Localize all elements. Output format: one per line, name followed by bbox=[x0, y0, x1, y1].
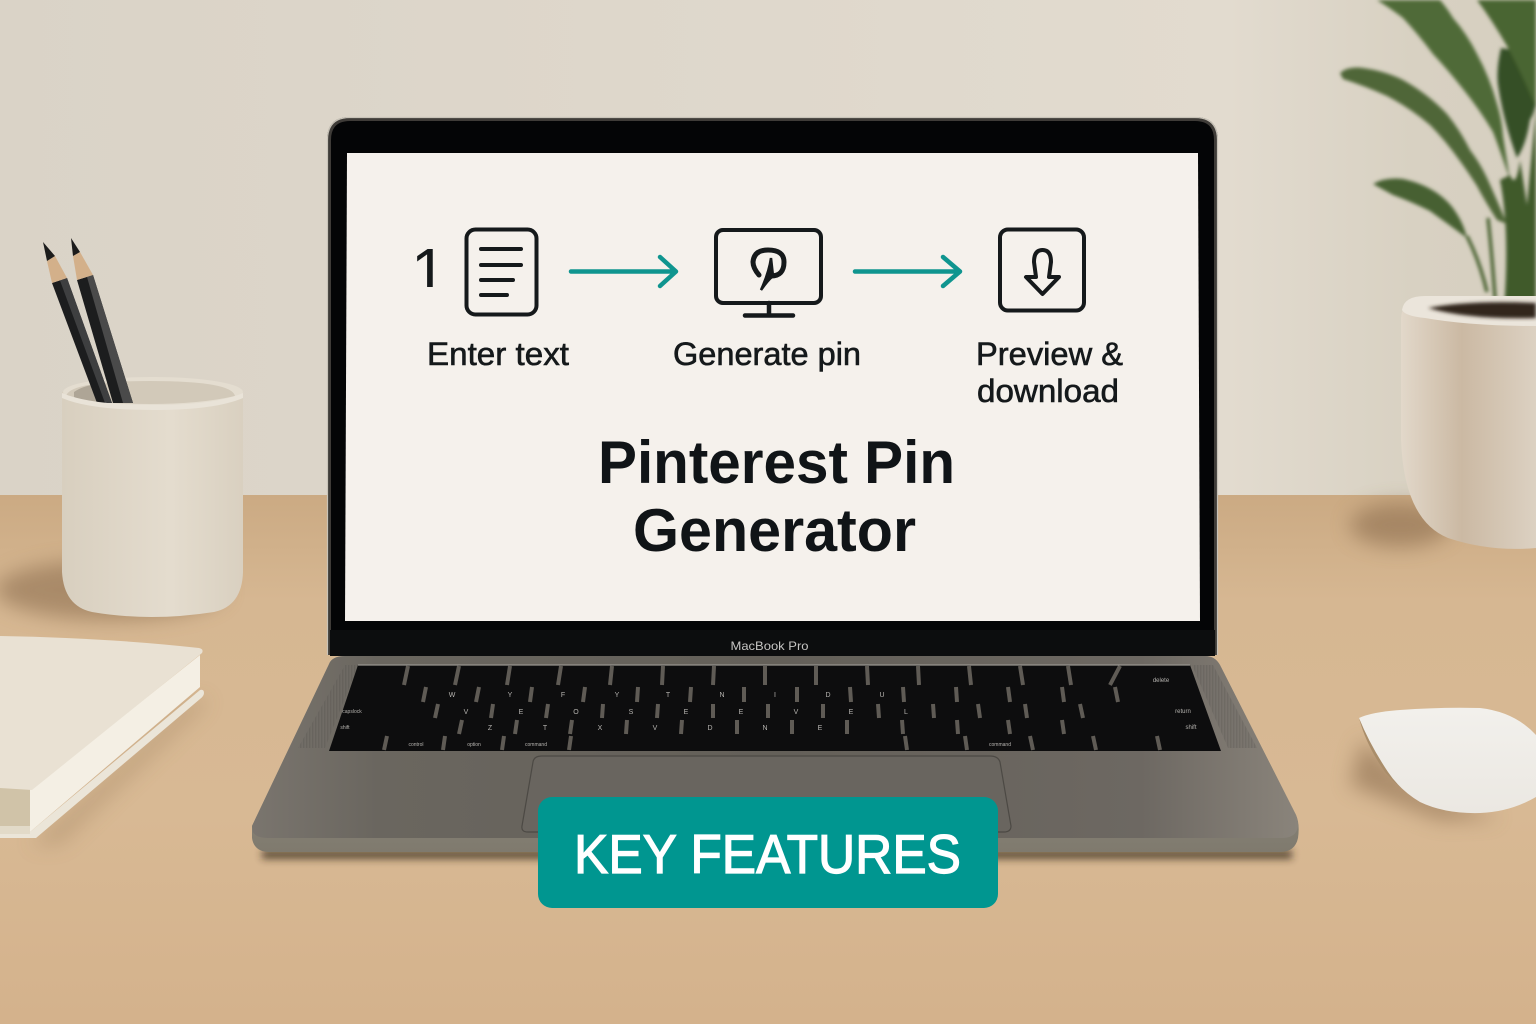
key labels: X bbox=[598, 725, 603, 732]
leaf upper broad bbox=[1377, 0, 1510, 180]
title: Pinterest Pin bbox=[598, 429, 955, 496]
key labels: Z bbox=[488, 725, 493, 732]
stems bbox=[1467, 218, 1495, 298]
screen bbox=[345, 153, 1200, 621]
pencil cup with pencils bbox=[43, 238, 243, 617]
step label: preview and download: download bbox=[977, 373, 1119, 409]
key labels: Y bbox=[615, 692, 620, 699]
step label: enter text: Enter text bbox=[427, 336, 569, 372]
key features banner: KEY FEATURES bbox=[574, 823, 961, 885]
key labels: D bbox=[707, 725, 713, 732]
key labels: V bbox=[653, 725, 658, 732]
laptop contact shadow bbox=[262, 850, 1292, 859]
step number: 1 bbox=[411, 235, 447, 307]
key labels: T bbox=[543, 725, 548, 732]
leaf left long bbox=[1340, 68, 1507, 224]
notebook bbox=[0, 636, 204, 838]
key labels: shift bbox=[340, 725, 350, 731]
laptop bbox=[252, 117, 1299, 852]
key labels: U bbox=[879, 692, 885, 699]
pencil right bbox=[71, 238, 133, 403]
key labels: command bbox=[989, 742, 1011, 748]
trackpad bbox=[522, 756, 1011, 832]
speaker grills bbox=[298, 665, 358, 748]
key labels: N bbox=[719, 692, 725, 699]
brand label: MacBook Pro bbox=[730, 639, 809, 653]
icon: document bbox=[466, 230, 536, 314]
key labels: E bbox=[849, 709, 854, 716]
icon: monitor with Pinterest logo bbox=[716, 230, 821, 316]
key labels: D bbox=[825, 692, 831, 699]
desk shadows bbox=[0, 503, 1500, 845]
laptop base bbox=[252, 656, 1299, 852]
key labels: shift bbox=[1185, 725, 1197, 731]
key labels: return bbox=[1175, 709, 1191, 715]
key labels: E bbox=[684, 709, 689, 716]
keyboard bbox=[329, 665, 1221, 751]
leaf right bbox=[1477, 0, 1536, 107]
key labels: V bbox=[794, 709, 799, 716]
key labels: I bbox=[774, 692, 776, 699]
key labels: command bbox=[525, 742, 547, 748]
key labels: N bbox=[762, 725, 768, 732]
key labels: V bbox=[464, 709, 469, 716]
arrow 2 bbox=[855, 257, 960, 286]
wall background bbox=[0, 0, 1536, 496]
key labels: F bbox=[561, 692, 565, 699]
step label: generate pin: Generate pin bbox=[673, 336, 861, 372]
key labels: capslock bbox=[342, 709, 362, 715]
title bbox=[598, 429, 955, 564]
key labels: E bbox=[818, 725, 823, 732]
key labels: E bbox=[519, 709, 524, 716]
key labels: O bbox=[573, 709, 579, 716]
key labels: E bbox=[739, 709, 744, 716]
pencil left bbox=[43, 242, 112, 403]
laptop lid bbox=[327, 117, 1218, 655]
arrow 1 bbox=[571, 257, 676, 286]
key labels: delete bbox=[1153, 678, 1170, 684]
title: Generator bbox=[633, 497, 916, 564]
step label: preview and download: Preview & bbox=[976, 336, 1123, 372]
key labels: S bbox=[629, 709, 634, 716]
key labels: option bbox=[467, 742, 481, 748]
plant bbox=[1340, 0, 1536, 310]
hinge strip bbox=[330, 630, 1215, 656]
key labels: L bbox=[904, 709, 908, 716]
mouse bbox=[1359, 708, 1536, 813]
key labels bbox=[340, 678, 1197, 748]
step label: preview and download bbox=[976, 336, 1123, 409]
wooden desk bbox=[0, 495, 1536, 1024]
key labels: control bbox=[408, 742, 424, 748]
key features banner bbox=[538, 797, 998, 908]
key labels: T bbox=[666, 692, 671, 699]
key labels: W bbox=[449, 692, 456, 699]
key labels: Y bbox=[508, 692, 513, 699]
leaf lower small bbox=[1373, 179, 1467, 238]
planter pot bbox=[1401, 296, 1536, 549]
icon: download bbox=[1000, 230, 1084, 310]
leaf dark bbox=[1497, 48, 1536, 158]
